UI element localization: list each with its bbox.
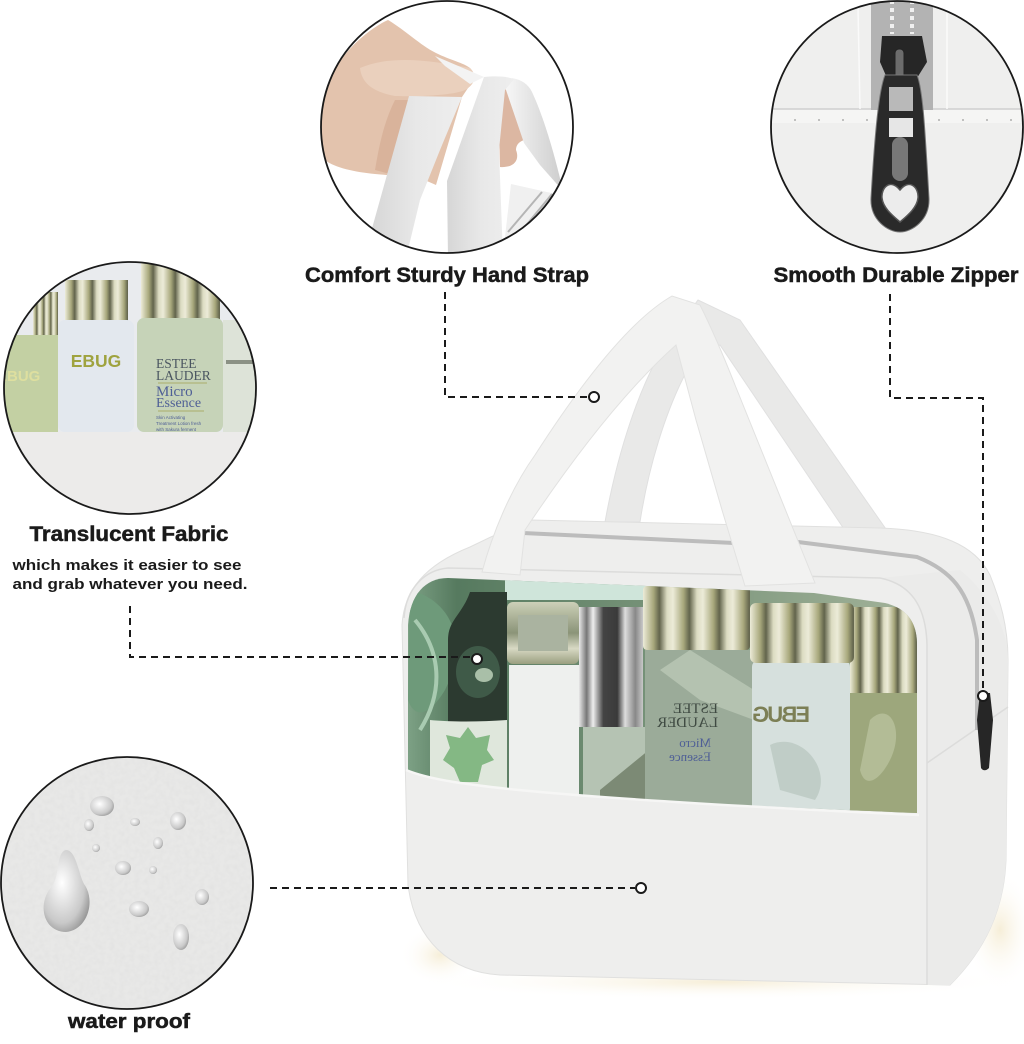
bag body (402, 520, 1008, 985)
chrome bottle (579, 607, 643, 727)
strap 2 (447, 76, 514, 258)
middle EBUG bottle (65, 280, 128, 322)
text block: fabric description (11, 557, 247, 593)
back strap (506, 78, 560, 185)
heading: hand strap: Comfort Sturdy Hand Strap (305, 264, 589, 287)
right far bottle (223, 320, 255, 432)
perfume cap (643, 586, 750, 650)
clear window with bottles (405, 575, 920, 818)
clear window with bottles: ESTEE (673, 701, 718, 717)
circle photo: translucent fabric: EBUG (71, 351, 121, 371)
bag side panel (880, 570, 1008, 985)
callout: zipper leader (890, 294, 988, 701)
front strap (482, 296, 815, 586)
succulent label (443, 727, 494, 782)
fold over finger (435, 56, 484, 84)
dark bottle (448, 592, 507, 722)
Estee Lauder bottle (645, 650, 754, 810)
heading: water proof: water proof (67, 1011, 190, 1033)
callout: fabric leader (130, 606, 482, 664)
zipper pull (977, 693, 993, 770)
product: toiletry bag (400, 296, 1024, 1000)
zipper tape (871, 0, 933, 110)
strap 1 (371, 96, 462, 254)
circle photo: zipper (770, 0, 1024, 254)
circle photo: translucent fabric: Skin Activating (156, 415, 186, 420)
heading: zipper: Smooth Durable Zipper (774, 264, 1018, 287)
bag rear strap (605, 300, 888, 532)
pocket seam (406, 770, 919, 815)
circle photo: water droplets on leather (0, 756, 254, 1010)
clear window with bottles: Essence (669, 749, 711, 764)
circle photo: translucent fabric: Essence (156, 396, 201, 411)
circle photo: translucent fabric (0, 260, 262, 516)
right Estee Lauder bottle (141, 262, 220, 320)
circle photo: translucent fabric: LAUDER (156, 368, 211, 383)
text block: fabric description: which makes it easier to see (11, 557, 241, 574)
callout: strap leader (445, 292, 599, 402)
EBUG bottle (752, 660, 850, 815)
bottom piece (505, 184, 552, 238)
pull tab (871, 75, 929, 232)
left bottle (33, 292, 58, 335)
callout: waterproof leader (270, 883, 646, 893)
clear window with bottles: LAUDER (657, 715, 718, 731)
slider (880, 36, 927, 78)
circle photo: translucent fabric: ESTEE (156, 356, 196, 371)
circle photo: translucent fabric: Treatment Lotion fresh (156, 421, 202, 426)
white bottle with clear cap (507, 602, 579, 664)
heading: translucent fabric: Translucent Fabric (30, 523, 229, 546)
back right bottle (850, 607, 917, 693)
circle photo: translucent fabric: with Sakura ferment (156, 427, 197, 432)
top zipper tracks (523, 533, 977, 730)
text block: fabric description: and grab whatever you need. (12, 576, 248, 593)
clear window with bottles: EBUG (752, 702, 810, 727)
circle photo: translucent fabric: Micro (156, 384, 193, 400)
hand (320, 20, 474, 185)
circle photo: hand strap (320, 0, 576, 258)
clear window with bottles: Micro (679, 735, 711, 750)
